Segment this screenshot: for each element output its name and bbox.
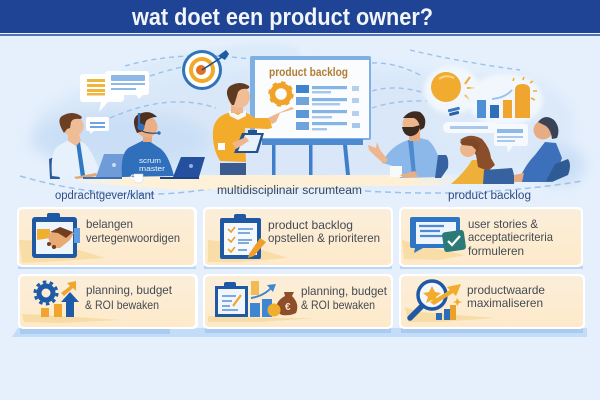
icon: report, bars and money bag: €	[285, 302, 291, 313]
panel: product backlog opstellen	[203, 207, 393, 267]
person: scrum master	[122, 112, 174, 177]
chair: bearded team member	[435, 155, 448, 178]
card text	[467, 283, 545, 310]
panel: planning budget 2	[203, 274, 393, 329]
card text: formuleren	[468, 244, 524, 258]
card text: productwaarde	[467, 283, 545, 297]
card text: acceptatiecriteria	[468, 230, 553, 244]
icon: report, bars and money bag	[215, 281, 297, 317]
person: bearded team member	[368, 111, 442, 178]
icon: checklist clipboard	[220, 214, 266, 259]
whiteboard: product backlog	[250, 56, 371, 175]
card text: belangen	[86, 217, 133, 231]
card text: product backlog	[268, 218, 353, 232]
pill and speech bubble	[443, 122, 528, 153]
person: right team member	[514, 117, 562, 182]
person: product owner presenting	[213, 83, 294, 175]
icon: gear	[270, 83, 292, 105]
label: product backlog: product backlog	[448, 190, 531, 202]
card text: planning, budget	[301, 284, 388, 298]
card shadow band	[12, 266, 587, 337]
icon: light bulb	[424, 66, 480, 116]
card text	[85, 283, 173, 312]
card text: maximaliseren	[467, 296, 543, 310]
card text	[268, 218, 380, 245]
chair: right team member	[546, 159, 570, 182]
backlog list	[296, 85, 360, 130]
panel: user stories	[399, 207, 583, 267]
table	[70, 175, 470, 190]
board heading: product backlog	[269, 65, 348, 79]
chair: woman	[483, 168, 514, 184]
icon: magnifier with star and bars	[410, 281, 462, 320]
card text: planning, budget	[86, 283, 173, 297]
scrum master label	[139, 156, 166, 173]
header band	[0, 0, 600, 36]
card text: vertegenwoordigen	[86, 231, 180, 245]
title: wat doet een product owner?	[131, 4, 433, 31]
icon: speech bubble with check	[410, 217, 466, 253]
card text: user stories &	[468, 217, 538, 231]
clipboard	[234, 130, 264, 153]
panel: belangen vertegenwoordigen	[17, 207, 197, 267]
icon: handshake clipboard	[32, 213, 80, 258]
laptop: opdrachtgever	[83, 154, 130, 179]
laptop: scrum master	[160, 157, 205, 179]
card text: & ROI bewaken	[85, 298, 159, 312]
panel: productwaarde maximaliseren	[399, 274, 585, 329]
card text: & ROI bewaken	[301, 298, 375, 312]
background wash	[20, 42, 585, 194]
icon: coffee cup	[131, 174, 143, 183]
person: woman	[451, 136, 495, 184]
speech bubbles	[80, 71, 149, 134]
card text	[468, 217, 553, 258]
card text: opstellen & prioriteren	[268, 231, 380, 245]
person: opdrachtgever	[52, 113, 99, 179]
card text	[301, 284, 388, 312]
icon: target with arrow	[182, 50, 229, 90]
label: opdrachtgever/klant: opdrachtgever/klant	[55, 190, 155, 202]
scrum master label: master	[139, 164, 166, 173]
label: multidisciplinair scrumteam: multidisciplinair scrumteam	[217, 185, 362, 197]
card text	[86, 217, 180, 245]
panel: planning budget 1	[18, 274, 198, 329]
icon: gear with bars and arrows	[35, 281, 79, 317]
chair: opdrachtgever	[49, 157, 60, 179]
bar chart with arrow	[467, 74, 543, 126]
scrum master label: scrum	[139, 156, 161, 165]
